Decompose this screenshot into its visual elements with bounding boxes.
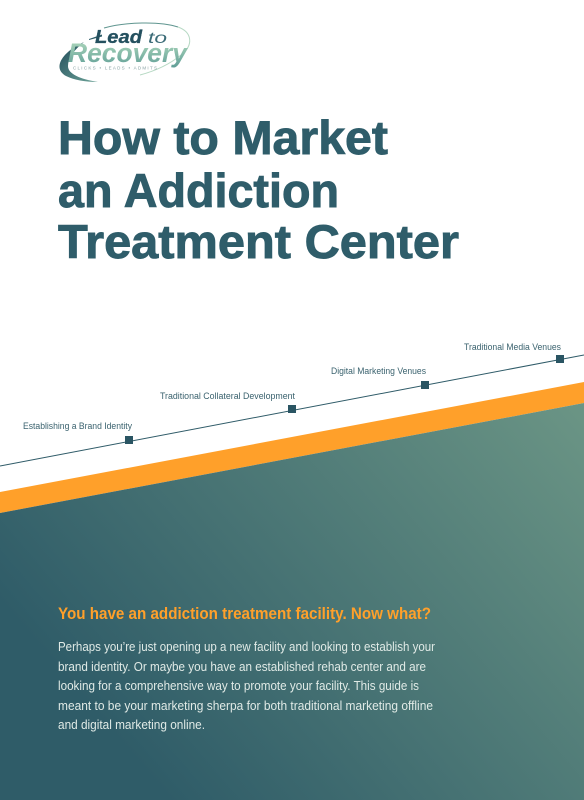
milestone: Digital Marketing Venues: Digital Marketing Venues [331, 366, 426, 376]
milestone: Traditional Media Venues: Traditional Media Venues [464, 342, 561, 352]
logo: Lead to Recovery: Recovery [68, 38, 189, 68]
subheading: You have an addiction treatment facility. Now what? [58, 605, 431, 623]
title: Treatment Center [58, 216, 459, 269]
intro paragraph: meant to be your marketing sherpa for both traditional marketing offline [58, 699, 433, 713]
title [58, 112, 459, 269]
timeline [0, 342, 584, 466]
logo: Lead to Recovery: CLICKS • LEADS • ADMITS [73, 66, 157, 70]
milestone: Digital Marketing Venues [331, 366, 429, 389]
logo: Lead to Recovery: Lead [95, 27, 143, 47]
milestone: Traditional Collateral Development [160, 391, 296, 413]
milestone: Traditional Collateral Development: Traditional Collateral Development [160, 391, 295, 401]
logo: Lead to Recovery [60, 23, 190, 82]
intro paragraph: looking for a comprehensive way to promote your facility. This guide is [58, 679, 419, 693]
milestone: Traditional Media Venues [464, 342, 564, 363]
title: How to Market [58, 112, 388, 165]
intro paragraph: Perhaps you’re just opening up a new facility and looking to establish your [58, 640, 435, 654]
intro paragraph [58, 640, 435, 732]
title: an Addiction [58, 165, 339, 218]
intro paragraph: and digital marketing online. [58, 718, 205, 732]
milestone: Establishing a Brand Identity: Establishing a Brand Identity [23, 421, 132, 431]
logo: Lead to Recovery: to [148, 30, 168, 47]
orange diagonal band [0, 382, 584, 513]
milestone: Establishing a Brand Identity [23, 421, 133, 444]
gradient panel [0, 403, 584, 800]
intro paragraph: brand identity. Or maybe you have an established rehab center and are [58, 660, 426, 674]
